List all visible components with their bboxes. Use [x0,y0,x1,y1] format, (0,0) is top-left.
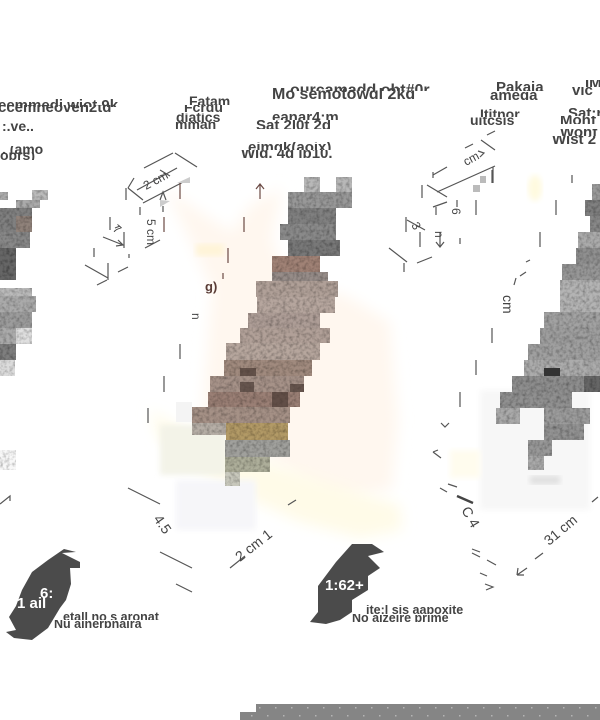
vertical dimension lines centre [148,183,264,423]
centre kangaroo fur [192,177,352,486]
caption left [54,612,159,628]
left kangaroo fragment [0,190,48,470]
dimension box right [389,131,495,272]
dimension box left: 2 cm [141,168,170,193]
label: left box dimensions: Fatam [189,93,230,109]
dimension box right: 6 [449,208,463,215]
dimension box right: cm [461,149,482,169]
label: top left note: . (amo [2,141,43,157]
diagonal dimensions bottom left: 2 cm 1 [232,526,275,564]
rocker base grey white strip centre [160,402,256,530]
caption right [352,605,463,622]
badge right: 1:62+ [325,577,364,594]
label: centre heading: ourcamadd.oht#0r [290,82,430,99]
rocker base grey white strip right [450,390,590,510]
label: far right note: Wist 2 [552,131,596,148]
label: top left note: ccemneoven2td [0,99,111,116]
centre fur dark patches [240,368,304,407]
label: right box dimensions: amega [490,87,538,104]
label: top left note [0,97,119,163]
label: far right note: vlc [572,82,593,99]
dimension box left: 7 [110,222,124,237]
label: centre heading: eimgk(aoix) [248,139,331,156]
label: far right note [552,80,600,144]
label: centre heading: Mo semotowgl 2kg [272,86,415,103]
rocker base pale yellow [150,410,402,538]
badge left: 1 ail [17,595,46,612]
label: centre heading [241,82,430,162]
label: left box dimensions: Fcrdu [184,99,223,115]
dimension box left [85,153,197,285]
right kangaroo fur [496,184,600,470]
vertical dimension lines centre: n [189,313,203,320]
badge left [6,549,80,640]
label: top left note: oprs) [0,147,35,163]
bottom grey bar [240,704,600,720]
caption left: etall no s aronat [63,610,160,624]
label: top left note: :.ve.. [2,118,34,134]
badge left: 6: [40,585,53,602]
cream kangaroo silhouette [165,188,398,500]
caption right: ite:l sis aapoxite [366,603,463,617]
yellow blob right [528,175,542,201]
dimension box left: 5 cm [144,219,158,245]
label: centre heading: Wig. 4g lp10. [241,145,333,162]
vertical dimension lines centre: g) [205,279,217,294]
label: right box dimensions: Ititnor [480,106,520,122]
caption left: Nu ainerpnaira [54,617,143,631]
diagonal dimensions bottom right [433,450,598,590]
centre kangaroo ear [280,177,352,256]
label: right box dimensions: Pakaia [496,79,544,96]
label: left box dimensions: mman [175,116,216,132]
vertical dimension lines right: cm [500,295,516,314]
label: right box dimensions [470,81,544,125]
label: centre heading: Sat 2l0t 2d [256,117,331,134]
badge right [310,544,384,624]
caption right: No aizeire prime [352,611,449,625]
label: right box dimensions: uitcsis [470,112,515,128]
diagonal dimensions bottom right: C 4 [458,504,483,531]
label: far right note: Wohf [560,124,598,141]
label: top left note: eemmedi wiot 9k [0,97,119,114]
label: left box dimensions [176,96,230,129]
dimension box right: n [432,231,446,238]
vertical dimension lines right [441,170,572,427]
label: left box dimensions: diatics [176,109,221,125]
dimension box right: 3 [408,220,424,233]
diagonal dimensions bottom left: 4.5 [151,512,175,537]
diagonal dimensions bottom left [0,488,296,592]
label: far right note: Mohf [560,112,597,129]
diagonal dimensions bottom right: 31 cm [541,512,580,548]
label: centre heading: eanar4:m [272,109,339,126]
right fur dark patch [544,368,560,376]
